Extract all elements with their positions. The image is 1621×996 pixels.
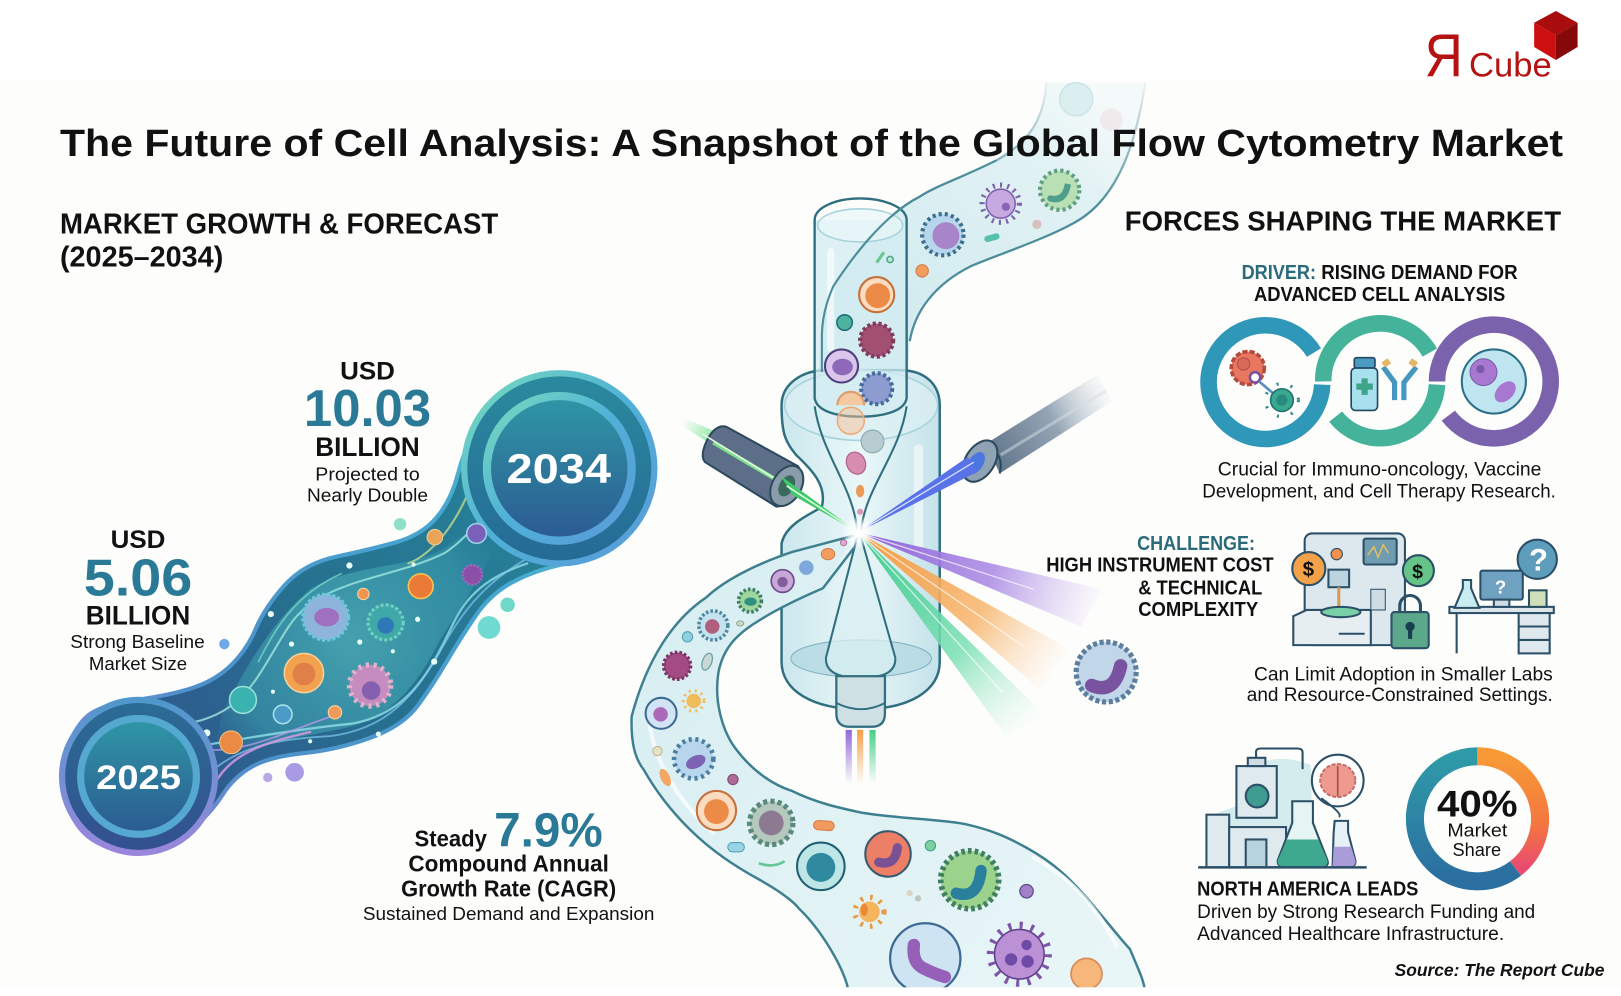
vertical capillary — [815, 198, 907, 417]
large cells in lower tube — [697, 791, 1102, 994]
icon: costly instrument: $ — [1412, 561, 1423, 583]
stat: CAGR: Growth Rate (CAGR) — [401, 875, 616, 901]
challenge heading: CHALLENGE: — [1137, 532, 1255, 555]
stat: CAGR: Compound Annual — [408, 851, 609, 877]
donut chart: 40% market share: Market — [1447, 819, 1508, 840]
challenge description — [1247, 664, 1553, 706]
stat: 2034 market size: BILLION — [315, 432, 420, 462]
regional lead text — [1197, 877, 1535, 945]
hourglass nozzle and cone — [815, 406, 907, 676]
badge: 2025 — [62, 700, 215, 853]
lower sample tube — [632, 536, 1144, 987]
green laser — [680, 417, 858, 532]
challenge heading: COMPLEXITY — [1138, 598, 1258, 621]
stat: 2034 market size: USD — [340, 358, 395, 385]
stat: 2025 market size: BILLION — [86, 600, 190, 630]
donut chart: 40% market share: 40% — [1437, 783, 1518, 825]
driver heading: ADVANCED CELL ANALYSIS — [1254, 283, 1505, 306]
challenge heading: & TECHNICAL — [1138, 576, 1262, 599]
flow cell chamber — [782, 370, 940, 727]
challenge description: Can Limit Adoption in Smaller Labs — [1254, 664, 1553, 685]
icon: costly instrument — [1292, 533, 1434, 648]
driver heading — [1242, 261, 1518, 306]
cells in lower tube — [646, 540, 847, 788]
stat: 2025 market size: Strong Baseline — [70, 631, 205, 652]
heading: market growth: (2025–2034) — [60, 242, 223, 274]
driver heading: RISING DEMAND FOR — [1321, 261, 1518, 284]
icon: research lab with brain — [1198, 748, 1367, 867]
heading: forces: FORCES SHAPING THE MARKET — [1125, 206, 1561, 237]
source note: Source: The Report Cube — [1395, 960, 1605, 980]
badge: 2025: 2025 — [96, 759, 181, 797]
stat: 2025 market size: 5.06 — [84, 548, 192, 606]
donut chart: 40% market share: Share — [1452, 839, 1501, 860]
donut chart: 40% market share — [1415, 756, 1540, 881]
challenge description: and Resource-Constrained Settings. — [1247, 685, 1553, 706]
stat: CAGR: Steady — [415, 826, 487, 852]
icon: vial and antibody — [1351, 358, 1416, 410]
tube overlap over capillary — [822, 160, 997, 372]
driver description — [1202, 460, 1556, 502]
page-bottom mask — [0, 987, 1621, 996]
stat: CAGR — [363, 804, 654, 924]
scattered light beams — [846, 532, 1102, 784]
stat: CAGR: 7.9% — [494, 804, 603, 858]
interrogation point glow — [842, 516, 875, 549]
stat: 2025 market size: USD — [111, 527, 165, 554]
stat: 2034 market size — [304, 358, 431, 505]
icon: immune cell attacking tumour cell — [1231, 352, 1298, 417]
floating droplets — [219, 518, 515, 782]
challenge heading — [1046, 532, 1274, 621]
stat: 2034 market size: Projected to — [315, 464, 420, 485]
logo — [1425, 11, 1578, 90]
regional lead text: NORTH AMERICA LEADS — [1197, 877, 1418, 900]
badge: 2034 — [464, 373, 654, 563]
icon: desk with confused user — [1449, 540, 1557, 653]
icon: cell with nuclei — [1462, 349, 1526, 414]
logo: Я — [1425, 23, 1463, 90]
challenge heading: HIGH INSTRUMENT COST — [1046, 554, 1274, 577]
growth ribbon — [63, 376, 651, 853]
icon: desk with confused user: ? — [1495, 576, 1506, 597]
cells in upper tube — [825, 83, 1123, 515]
heading: market growth: MARKET GROWTH & FORECAST — [60, 209, 499, 241]
icon: desk with confused user: ? — [1529, 543, 1548, 578]
ribbon cell overlapping badge — [467, 524, 486, 543]
badge: 2034: 2034 — [507, 446, 611, 492]
heading: market growth — [60, 209, 499, 274]
logo: Cube — [1469, 47, 1552, 85]
blue laser — [858, 374, 1112, 532]
driver heading: DRIVER: — [1242, 261, 1316, 284]
linked rings — [1209, 323, 1551, 439]
regional lead text: Advanced Healthcare Infrastructure. — [1197, 924, 1504, 945]
regional lead text: Driven by Strong Research Funding and — [1197, 902, 1535, 923]
stat: 2025 market size: Market Size — [89, 653, 187, 674]
driver description: Crucial for Immuno-oncology, Vaccine — [1218, 460, 1541, 481]
scattered cell right of beams — [1076, 642, 1136, 702]
cells inside ribbon — [220, 529, 482, 754]
title: The Future of Cell Analysis: A Snapshot of the Global Flow Cytometry Market — [60, 122, 1563, 165]
stat: CAGR: Sustained Demand and Expansion — [363, 903, 654, 924]
stat: 2025 market size — [70, 527, 205, 674]
upper sample tube — [816, 83, 1145, 398]
stat: 2034 market size: 10.03 — [304, 379, 431, 437]
stat: 2034 market size: Nearly Double — [307, 484, 428, 505]
driver description: Development, and Cell Therapy Research. — [1202, 481, 1556, 502]
icon: costly instrument: $ — [1303, 558, 1315, 581]
